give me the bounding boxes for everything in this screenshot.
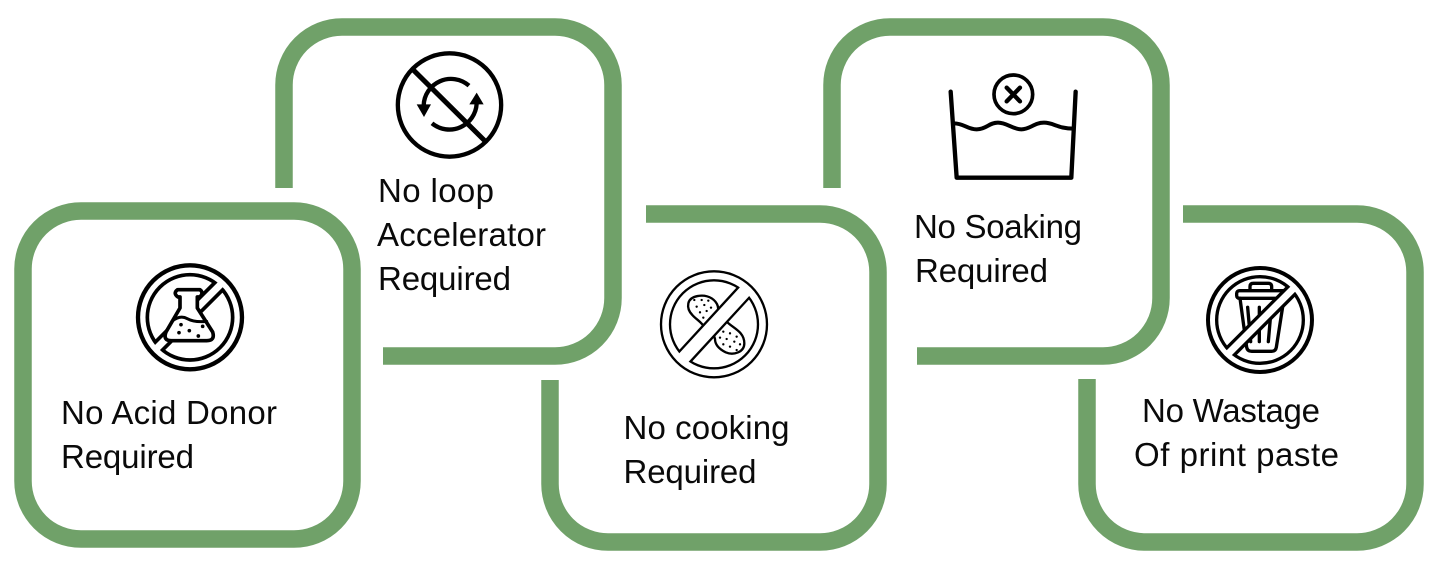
- panel frame: soaking: [832, 27, 1161, 356]
- panel: no loop accelerator: [284, 27, 613, 356]
- icon: crossed-out loop arrows: [398, 53, 501, 157]
- panel frame: acid donor: [23, 211, 352, 539]
- icon: crossed-out trash bin: [1208, 268, 1312, 372]
- label: No Soaking Required: Required: [915, 252, 1048, 289]
- panel: no cooking: [550, 214, 878, 542]
- panel frame: wastage: [1087, 214, 1415, 542]
- panel: no wastage: [1087, 214, 1415, 542]
- label: No loop Accelerator Required: No loop: [378, 172, 494, 209]
- panel frame: loop accelerator: [284, 27, 613, 356]
- label: No Soaking Required: No Soaking: [914, 208, 1082, 245]
- label: No cooking Required: No cooking: [624, 409, 790, 446]
- label: No loop Accelerator Required: Accelerator: [377, 216, 546, 253]
- icon: wash basin with cross: [951, 75, 1076, 178]
- label: No loop Accelerator Required: Required: [378, 260, 511, 297]
- panel: no soaking: [832, 27, 1161, 356]
- label: No Acid Donor Required: No Acid Donor: [61, 394, 277, 431]
- label: No cooking Required: Required: [624, 453, 756, 490]
- label: No Wastage Of print paste: No Wastage: [1142, 392, 1320, 429]
- label: No Acid Donor Required: Required: [61, 438, 194, 475]
- panel: no acid donor: [23, 211, 352, 539]
- label: No Wastage Of print paste: Of print paste: [1134, 436, 1339, 473]
- icon: crossed-out flask: [138, 265, 242, 369]
- panel frame: cooking: [550, 214, 878, 542]
- icon: crossed-out beans: [661, 271, 767, 377]
